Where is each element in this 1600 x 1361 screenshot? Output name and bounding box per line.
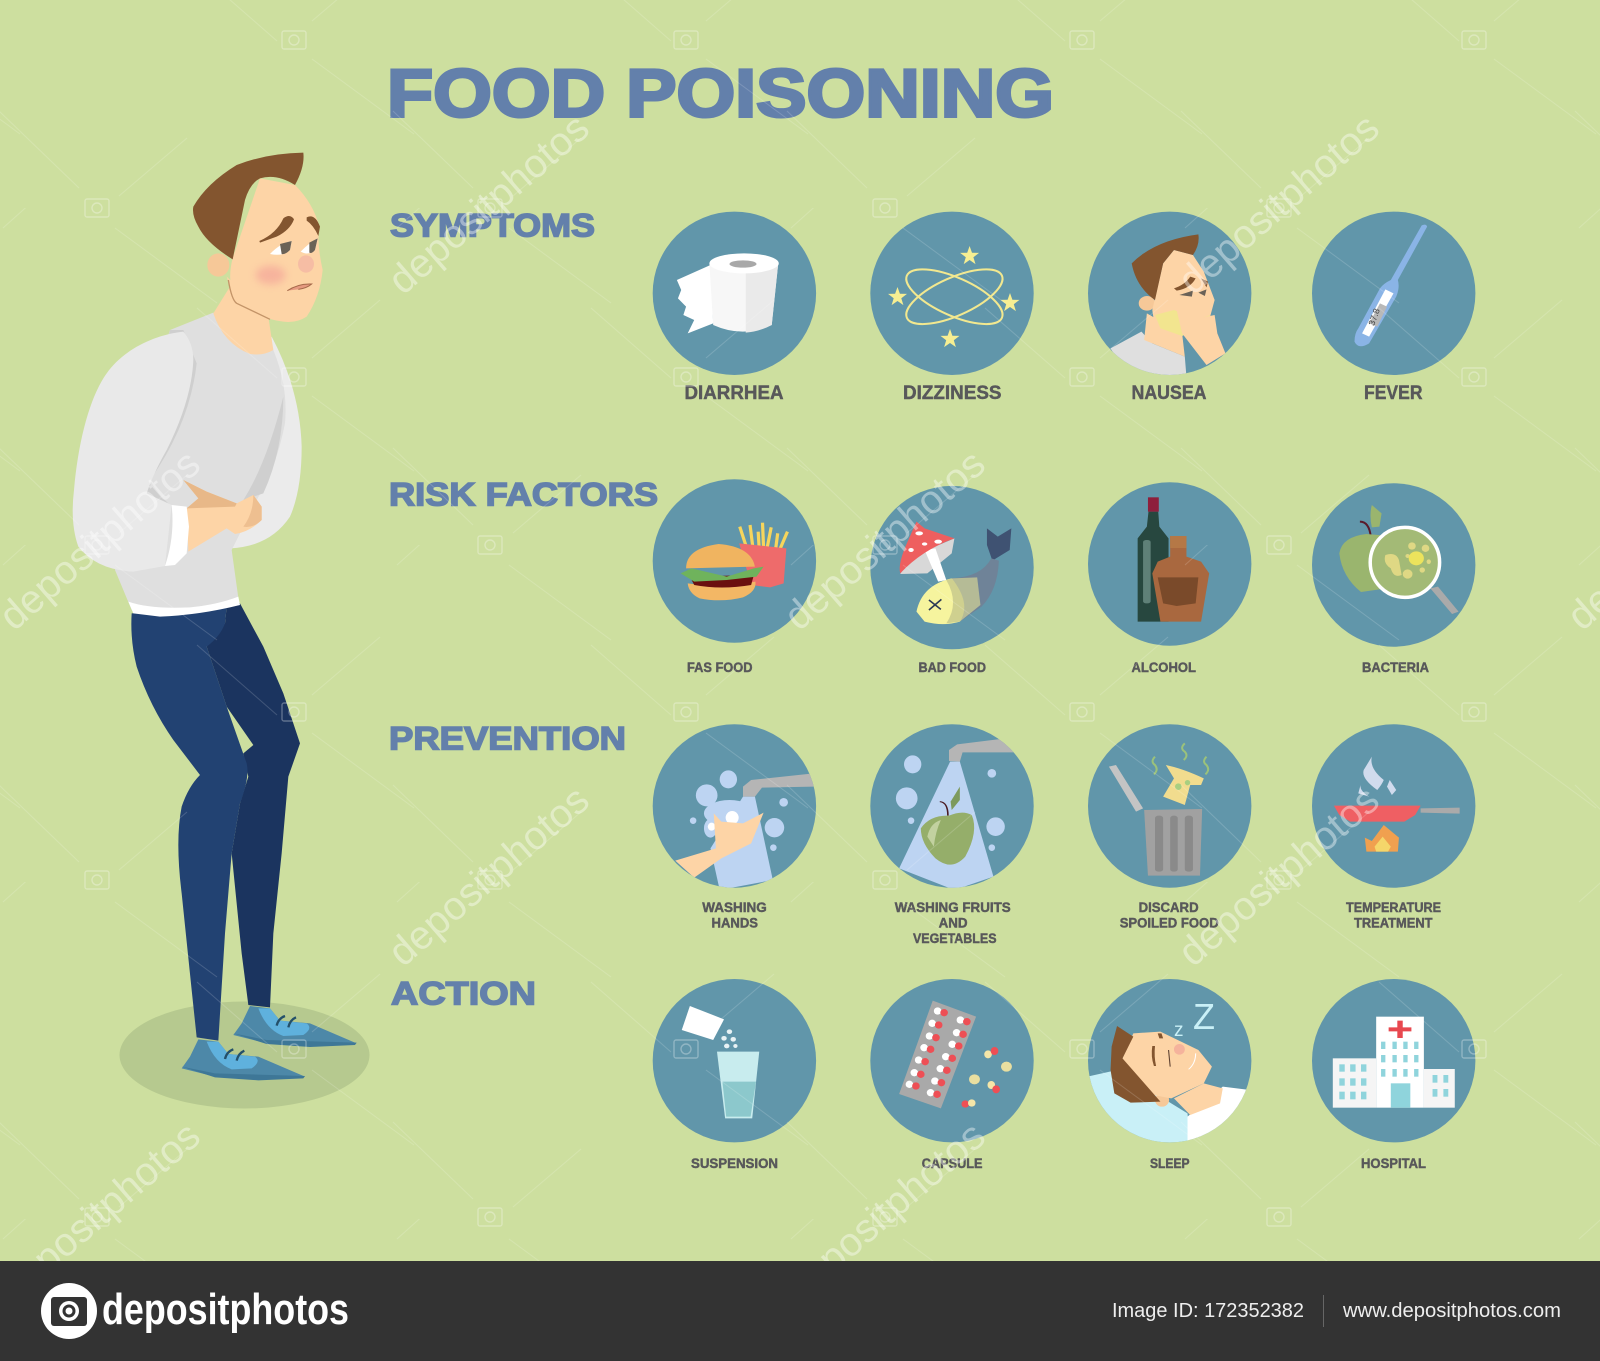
watermark overlay: depositphotos bbox=[380, 778, 598, 975]
label: washing hands: HANDS bbox=[712, 916, 758, 930]
icon: thermometer: 37.8 bbox=[1366, 307, 1382, 327]
label: discard spoiled food bbox=[1120, 900, 1219, 930]
footer bar bbox=[0, 1261, 1600, 1361]
label: alcohol: ALCOHOL bbox=[1132, 659, 1196, 675]
ear bbox=[207, 253, 229, 277]
icon: washing hands bbox=[653, 724, 816, 890]
hem bbox=[128, 597, 240, 617]
label: dizziness: DIZZINESS bbox=[903, 383, 1002, 404]
legs and shoes bbox=[131, 603, 357, 1080]
label: washing fruits and vegetables: AND bbox=[939, 916, 968, 930]
icon: bacteria under magnifier bbox=[1312, 483, 1475, 647]
watermark overlay: depositphotos bbox=[1170, 778, 1388, 975]
watermark overlay: depositphotos bbox=[776, 1114, 994, 1311]
label: temperature treatment: TREATMENT bbox=[1354, 916, 1433, 930]
label: washing fruits and vegetables bbox=[895, 900, 1011, 946]
icon: sleep: z bbox=[1174, 1020, 1184, 1041]
heading: prevention: PREVENTION bbox=[389, 720, 626, 756]
label: fever: FEVER bbox=[1364, 383, 1423, 404]
icon: dizziness bbox=[870, 212, 1034, 375]
shirt body bbox=[115, 313, 286, 612]
label: nausea: NAUSEA bbox=[1132, 383, 1207, 404]
icon: discard spoiled food bbox=[1088, 724, 1251, 888]
back arm sleeve bbox=[217, 337, 302, 548]
label: washing fruits and vegetables: VEGETABLES bbox=[913, 931, 996, 946]
icon: temperature treatment bbox=[1312, 724, 1475, 888]
watermark overlay: depositphotos bbox=[380, 106, 598, 303]
heading: action: ACTION bbox=[391, 976, 536, 1012]
heading: risk factors: RISK FACTORS bbox=[389, 476, 658, 512]
brows bbox=[259, 216, 320, 243]
title: FOOD POISONING bbox=[387, 56, 1054, 132]
label: capsule: CAPSULE bbox=[922, 1156, 982, 1171]
icon: toilet paper bbox=[653, 212, 816, 375]
icon: hospital bbox=[1312, 979, 1475, 1142]
logo icon bbox=[41, 1283, 97, 1339]
hair bbox=[193, 153, 304, 259]
label: sleep: SLEEP bbox=[1150, 1156, 1190, 1171]
label: hospital: HOSPITAL bbox=[1361, 1156, 1426, 1171]
icon: sleep: Z bbox=[1193, 996, 1215, 1037]
jaw line bbox=[228, 280, 270, 319]
label: bacteria: BACTERIA bbox=[1362, 659, 1429, 675]
man figure bbox=[73, 153, 369, 1108]
label: temperature treatment: TEMPERATURE bbox=[1346, 900, 1441, 915]
label: diarrhea: DIARRHEA bbox=[684, 383, 784, 404]
face bbox=[230, 178, 323, 322]
front sleeve bbox=[73, 332, 193, 572]
icon: suspension bbox=[653, 979, 816, 1142]
watermark overlay: depositphotos bbox=[776, 442, 994, 639]
label: washing hands: WASHING bbox=[702, 900, 767, 915]
icon: washing fruits bbox=[870, 724, 1034, 890]
label: suspension: SUSPENSION bbox=[691, 1156, 778, 1171]
nose bbox=[298, 255, 314, 273]
eyes bbox=[270, 238, 318, 255]
cuff bbox=[165, 505, 189, 566]
icon: nausea bbox=[1088, 212, 1251, 377]
label: discard spoiled food: DISCARD bbox=[1139, 900, 1199, 915]
logo wordmark: depositphotos bbox=[102, 1285, 349, 1334]
ground shadow bbox=[120, 1002, 370, 1108]
heading: symptoms: SYMPTOMS bbox=[390, 208, 595, 244]
mouth bbox=[287, 284, 312, 291]
watermark overlay: depositphotos bbox=[1170, 106, 1388, 303]
label: discard spoiled food: SPOILED FOOD bbox=[1120, 916, 1219, 930]
image id: Image ID: 172352382 bbox=[1112, 1300, 1304, 1322]
icon: fast food bbox=[653, 479, 816, 643]
label: fast food: FAS FOOD bbox=[687, 659, 752, 675]
icon: alcohol bbox=[1088, 482, 1251, 646]
label: washing fruits and vegetables: WASHING FRUITS bbox=[895, 900, 1011, 915]
label: bad food: BAD FOOD bbox=[918, 659, 986, 675]
torso, arms and head bbox=[73, 153, 323, 617]
icon: sleep bbox=[1087, 979, 1251, 1147]
label: temperature treatment bbox=[1346, 900, 1441, 930]
forearm and hand bbox=[183, 480, 262, 552]
website: www.depositphotos.com bbox=[1342, 1300, 1561, 1322]
icon: thermometer bbox=[1312, 212, 1475, 375]
blush bbox=[256, 266, 286, 284]
neck bbox=[213, 277, 273, 354]
icon: capsule blister pack bbox=[870, 979, 1034, 1142]
icon: bad food bbox=[870, 486, 1034, 649]
label: washing hands bbox=[702, 900, 767, 930]
